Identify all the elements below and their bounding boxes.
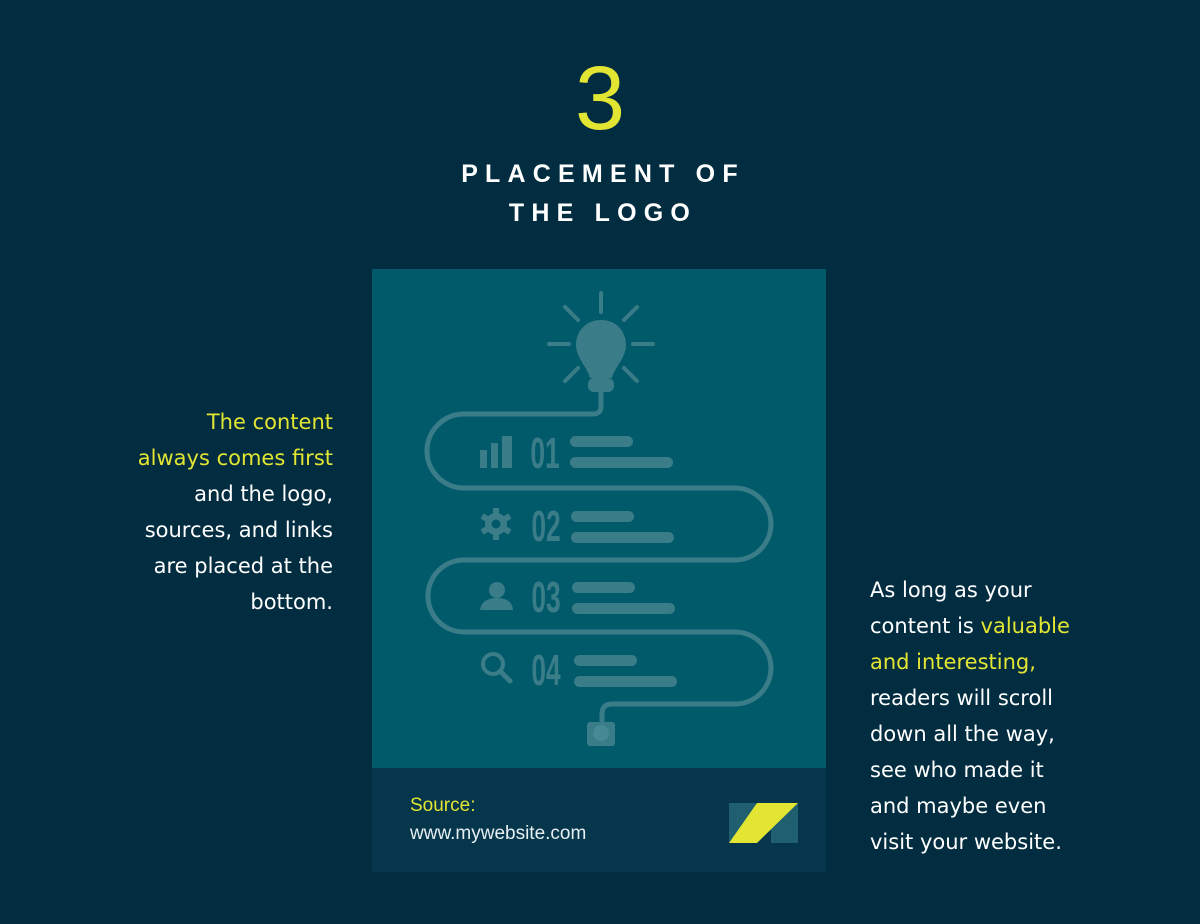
source text: Source: <box>410 795 475 816</box>
source text: www.mywebsite.com <box>409 823 586 844</box>
row 02: 02 <box>531 501 561 551</box>
right text block <box>870 578 1070 854</box>
title: PLACEMENT OF <box>461 160 745 188</box>
title <box>461 160 745 227</box>
left text block <box>138 410 333 614</box>
row 03 <box>480 572 675 622</box>
title: THE LOGO <box>509 199 697 227</box>
source text <box>409 795 586 844</box>
cable path <box>427 392 771 726</box>
icon: logo <box>729 803 798 843</box>
row 04 <box>483 645 677 695</box>
right text block: and maybe even <box>870 794 1046 818</box>
left text block: and the logo, <box>194 482 333 506</box>
icon: lightbulb <box>549 293 653 392</box>
right text block: and interesting, <box>870 650 1036 674</box>
left text block: are placed at the <box>154 554 333 578</box>
right text block: down all the way, <box>870 722 1055 746</box>
left text block: The content <box>206 410 333 434</box>
icon: plug <box>587 722 615 746</box>
left text block: bottom. <box>250 590 333 614</box>
right text block: visit your website. <box>870 830 1062 854</box>
row 03: 03 <box>531 572 561 622</box>
row 02 <box>482 501 674 551</box>
left text block: always comes first <box>138 446 333 470</box>
right text block: content is valuable <box>870 614 1070 638</box>
row 01: 01 <box>530 428 560 478</box>
row 01 <box>480 428 673 478</box>
right text block: see who made it <box>870 758 1044 782</box>
panel: footer <box>372 768 826 872</box>
title number: 3 <box>575 49 625 149</box>
left text block: sources, and links <box>145 518 333 542</box>
panel: infographic preview <box>372 269 826 768</box>
right text block: As long as your <box>870 578 1032 602</box>
row 04: 04 <box>531 645 561 695</box>
right text block: readers will scroll <box>870 686 1053 710</box>
